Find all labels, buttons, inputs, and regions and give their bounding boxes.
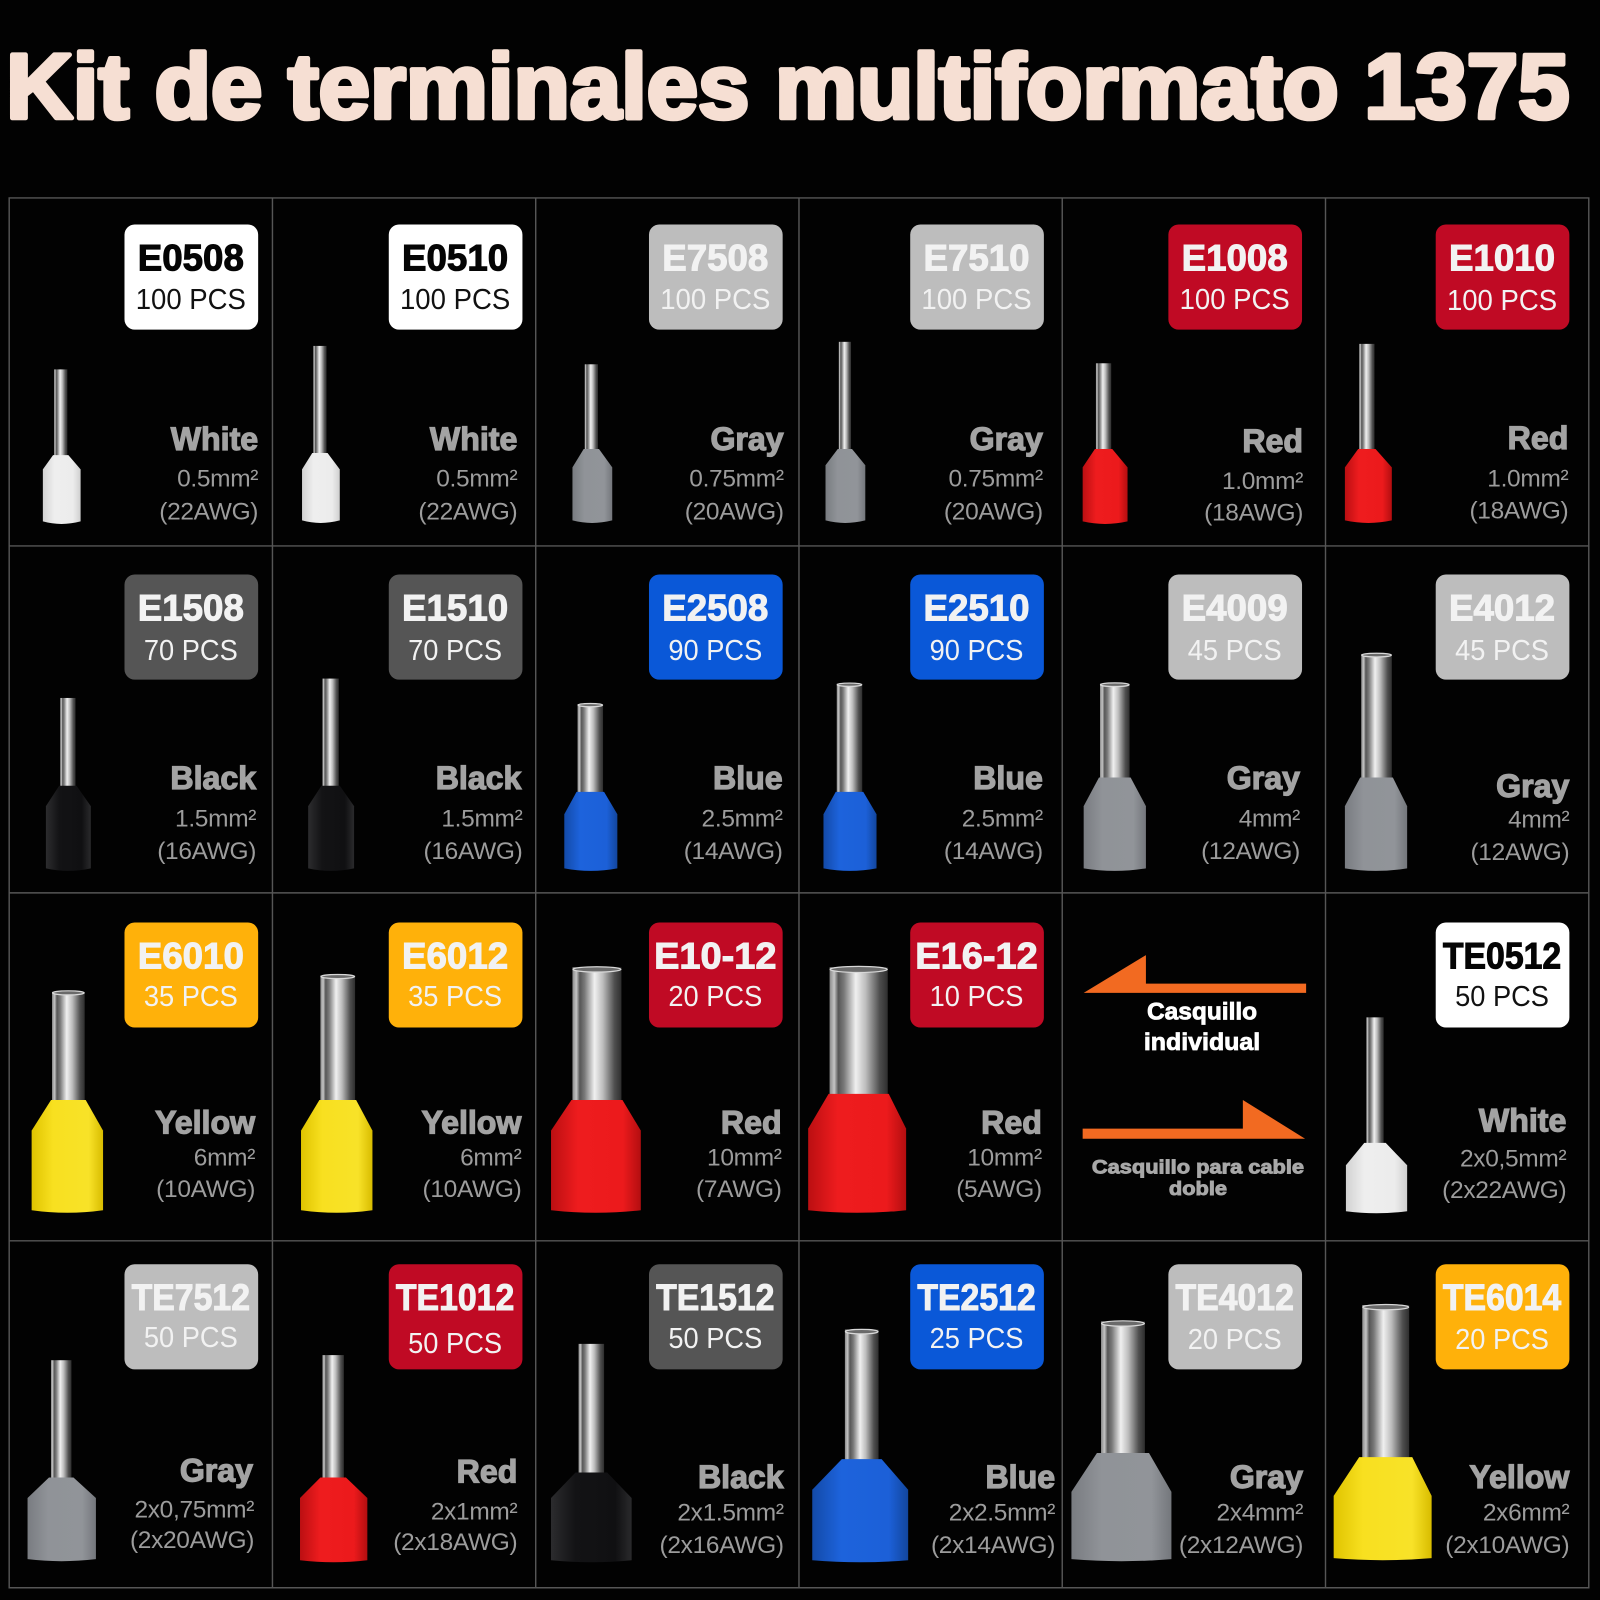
badge: E2510: E2510 xyxy=(923,587,1030,628)
specification: (16AWG) xyxy=(424,838,522,865)
specification xyxy=(684,806,783,865)
specification xyxy=(393,1498,518,1556)
specification xyxy=(130,1496,254,1554)
specification xyxy=(156,1144,255,1203)
panel: E4009 xyxy=(1084,574,1302,871)
colour label: Gray xyxy=(710,421,784,457)
badge: E0510 xyxy=(389,224,522,330)
specification: 2x2.5mm² xyxy=(949,1499,1055,1526)
specification: (7AWG) xyxy=(696,1176,782,1203)
panel: TE6014 xyxy=(1334,1264,1570,1560)
colour label: Blue xyxy=(713,760,783,796)
specification xyxy=(1470,807,1570,866)
colour label: Red xyxy=(981,1105,1042,1141)
specification: (16AWG) xyxy=(157,838,256,865)
badge: E7508: 100 PCS xyxy=(660,284,770,316)
badge: E4009: E4009 xyxy=(1182,587,1288,628)
specification: (5AWG) xyxy=(956,1176,1042,1203)
specification xyxy=(1442,1145,1566,1204)
badge: E6010: 35 PCS xyxy=(144,981,238,1013)
panel: E0510 xyxy=(302,224,522,525)
specification xyxy=(159,466,258,525)
badge: TE6014: TE6014 xyxy=(1443,1277,1562,1318)
specification: 10mm² xyxy=(707,1144,782,1171)
icon: gray ferrule xyxy=(1345,653,1407,871)
specification: 2x0,75mm² xyxy=(134,1496,254,1523)
badge: E1510: E1510 xyxy=(402,587,508,628)
panel: TE4012 xyxy=(1071,1264,1303,1561)
icon: yellow ferrule xyxy=(301,974,372,1213)
specification xyxy=(1469,466,1569,524)
specification: (18AWG) xyxy=(1469,497,1568,524)
specification: 2.5mm² xyxy=(962,806,1043,833)
specification: (18AWG) xyxy=(1204,499,1303,526)
icon: red ferrule xyxy=(551,967,641,1213)
specification xyxy=(685,466,784,525)
badge: E4012: 45 PCS xyxy=(1455,635,1549,667)
specification: (2x10AWG) xyxy=(1445,1532,1569,1559)
colour label: Gray xyxy=(1230,1459,1303,1495)
specification: 0.5mm² xyxy=(177,466,258,493)
colour label: White xyxy=(171,421,258,457)
badge: TE4012: 20 PCS xyxy=(1188,1324,1282,1356)
panel: E1508 xyxy=(46,574,258,871)
specification: 10mm² xyxy=(967,1144,1042,1171)
specification xyxy=(423,1144,522,1203)
badge: E2510 xyxy=(910,574,1044,680)
specification xyxy=(1204,468,1303,526)
badge: E16-12 xyxy=(910,922,1044,1028)
icon: gray twin ferrule xyxy=(28,1360,96,1561)
panel: E2508 xyxy=(564,574,783,871)
badge: TE0512 xyxy=(1436,922,1569,1028)
badge: E0508: E0508 xyxy=(138,237,244,278)
badge: E2508: E2508 xyxy=(662,587,768,628)
icon: gray twin ferrule xyxy=(1071,1321,1171,1561)
panel: TE1012 xyxy=(300,1264,522,1562)
arrow: points right to twin ferrules xyxy=(1083,1100,1305,1139)
badge: E1508: 70 PCS xyxy=(144,635,238,667)
colour label: Gray xyxy=(1227,760,1300,796)
icon: red ferrule xyxy=(1083,363,1128,524)
panel: E6012 xyxy=(301,922,522,1213)
specification: (22AWG) xyxy=(159,498,258,525)
badge: E1010: E1010 xyxy=(1449,237,1555,278)
specification: 0.5mm² xyxy=(436,466,518,493)
badge: E1010: 100 PCS xyxy=(1447,285,1557,317)
colour label: Red xyxy=(457,1454,517,1490)
badge: E2508: 90 PCS xyxy=(668,635,762,667)
title: Kit de terminales multiformato 1375 xyxy=(6,36,1569,138)
colour label: Blue xyxy=(973,760,1043,796)
panel: E16-12 xyxy=(808,922,1044,1213)
badge: E2508 xyxy=(649,574,783,680)
colour label: Gray xyxy=(180,1453,253,1489)
badge: E10-12 xyxy=(649,922,783,1028)
specification: 2x6mm² xyxy=(1483,1499,1570,1526)
colour label: Red xyxy=(1508,420,1568,456)
specification: (22AWG) xyxy=(418,498,517,525)
badge: TE2512: 25 PCS xyxy=(930,1323,1023,1355)
specification: 6mm² xyxy=(194,1144,255,1171)
badge: E10-12: 20 PCS xyxy=(668,981,762,1013)
specification: (10AWG) xyxy=(423,1176,521,1203)
badge: TE1012 xyxy=(389,1264,522,1369)
specification: 6mm² xyxy=(460,1144,522,1171)
specification: (12AWG) xyxy=(1201,838,1300,865)
badge: E4012: E4012 xyxy=(1449,587,1555,628)
specification: (2x20AWG) xyxy=(130,1527,254,1554)
icon: black ferrule xyxy=(308,679,354,871)
specification: (2x18AWG) xyxy=(393,1529,517,1556)
badge: E6010: E6010 xyxy=(138,935,244,976)
badge: TE4012 xyxy=(1168,1264,1302,1369)
specification: 2x1mm² xyxy=(431,1498,518,1525)
specification: 2x1.5mm² xyxy=(677,1499,784,1526)
badge: E1508 xyxy=(124,574,258,680)
badge: E1508: E1508 xyxy=(138,587,244,628)
specification xyxy=(944,466,1043,525)
panel: E1008 xyxy=(1083,224,1303,526)
icon: blue ferrule xyxy=(823,683,877,871)
colour label: Black xyxy=(698,1459,784,1495)
specification: (2x14AWG) xyxy=(931,1532,1055,1559)
icon: black ferrule xyxy=(46,698,91,871)
colour label: Gray xyxy=(970,421,1043,457)
icon: blue twin ferrule xyxy=(812,1329,908,1562)
panel: TE2512 xyxy=(812,1264,1055,1562)
specification: (2x22AWG) xyxy=(1442,1177,1566,1204)
badge: E7510: E7510 xyxy=(923,237,1030,278)
badge: TE1512 xyxy=(649,1264,783,1369)
badge: TE0512: 50 PCS xyxy=(1455,981,1549,1013)
legend text: single ferrule: Casquillo xyxy=(1147,998,1257,1025)
specification xyxy=(1201,806,1300,865)
colour label: Gray xyxy=(1496,768,1570,804)
panel: E10-12 xyxy=(551,922,783,1213)
panel: TE0512 xyxy=(1346,922,1569,1213)
badge: E0510: E0510 xyxy=(402,237,508,278)
badge: TE2512: TE2512 xyxy=(917,1277,1036,1318)
specification xyxy=(931,1499,1055,1559)
badge: E7508 xyxy=(649,224,783,330)
panel: ferrule type legend xyxy=(1083,955,1306,1200)
badge: E1510 xyxy=(389,574,522,680)
colour label: White xyxy=(430,421,517,457)
badge: E7510 xyxy=(910,224,1044,330)
legend text: twin ferrule xyxy=(1092,1156,1304,1200)
specification: (12AWG) xyxy=(1470,839,1569,866)
icon: gray ferrule xyxy=(1084,683,1146,871)
panel: E2510 xyxy=(823,574,1044,871)
panel: E1510 xyxy=(308,574,523,871)
panel: E7510 xyxy=(826,224,1044,525)
badge: TE1512: TE1512 xyxy=(656,1277,774,1318)
specification xyxy=(424,806,523,865)
specification: 2.5mm² xyxy=(702,806,783,833)
specification: 0.75mm² xyxy=(948,466,1043,493)
badge: E0508 xyxy=(124,224,258,330)
legend text: twin ferrule: doble xyxy=(1169,1178,1227,1200)
badge: TE1512: 50 PCS xyxy=(668,1323,762,1355)
legend text: single ferrule: individual xyxy=(1144,1029,1260,1056)
icon: yellow twin ferrule xyxy=(1334,1304,1432,1560)
specification: 4mm² xyxy=(1239,806,1300,833)
badge: E1010 xyxy=(1436,224,1569,330)
badge: E6010 xyxy=(124,922,258,1028)
colour label: Red xyxy=(721,1105,782,1141)
badge: E1008 xyxy=(1168,224,1302,330)
specification: 1.5mm² xyxy=(441,806,523,833)
specification xyxy=(157,806,256,865)
panel: TE7512 xyxy=(28,1264,258,1561)
icon: white ferrule xyxy=(302,346,340,523)
panel: E7508 xyxy=(572,224,784,525)
specification: (10AWG) xyxy=(156,1176,255,1203)
colour label: Yellow xyxy=(421,1105,522,1141)
legend text: single ferrule xyxy=(1144,998,1260,1056)
icon: gray ferrule xyxy=(826,342,865,523)
colour label: Black xyxy=(170,760,256,796)
colour label: Black xyxy=(436,760,522,796)
badge: E10-12: E10-12 xyxy=(654,935,777,976)
specification: 2x4mm² xyxy=(1217,1499,1303,1526)
colour label: White xyxy=(1479,1103,1566,1139)
icon: white twin ferrule xyxy=(1346,1017,1407,1213)
specification: 0.75mm² xyxy=(689,466,784,493)
badge: E7508: E7508 xyxy=(662,237,768,278)
specification: (20AWG) xyxy=(685,498,784,525)
specification xyxy=(696,1144,782,1203)
colour label: Blue xyxy=(985,1459,1055,1495)
specification: (20AWG) xyxy=(944,498,1043,525)
specification xyxy=(660,1499,784,1559)
specification: 1.0mm² xyxy=(1222,468,1303,495)
arrow: points left to single ferrules xyxy=(1084,955,1306,993)
specification: 2x0,5mm² xyxy=(1460,1145,1566,1172)
badge: TE7512 xyxy=(124,1264,258,1369)
icon: black twin ferrule xyxy=(551,1344,632,1562)
legend text: twin ferrule: Casquillo para cable xyxy=(1092,1156,1304,1178)
badge: E0508: 100 PCS xyxy=(136,284,246,316)
badge: E4009 xyxy=(1168,574,1302,680)
icon: white ferrule xyxy=(43,369,81,524)
badge: E1008: E1008 xyxy=(1182,237,1288,278)
specification: (2x16AWG) xyxy=(660,1532,784,1559)
icon: red ferrule xyxy=(1345,344,1392,523)
specification: 1.5mm² xyxy=(175,806,256,833)
specification xyxy=(418,466,518,525)
badge: TE4012: TE4012 xyxy=(1176,1277,1294,1318)
badge: TE7512: 50 PCS xyxy=(144,1322,238,1354)
badge: TE2512 xyxy=(910,1264,1044,1369)
specification xyxy=(956,1144,1042,1203)
badge: E1008: 100 PCS xyxy=(1180,284,1290,316)
panel: E1010 xyxy=(1345,224,1569,524)
colour label: Yellow xyxy=(155,1105,256,1141)
badge: TE0512: TE0512 xyxy=(1443,935,1561,976)
icon: blue ferrule xyxy=(564,703,617,871)
badge: E16-12: E16-12 xyxy=(915,935,1038,976)
badge: E6012: 35 PCS xyxy=(408,981,502,1013)
panel: E6010 xyxy=(32,922,258,1213)
badge: TE1012: TE1012 xyxy=(396,1277,514,1318)
specification: (14AWG) xyxy=(684,838,783,865)
specification: (14AWG) xyxy=(944,838,1043,865)
badge: E0510: 100 PCS xyxy=(400,284,510,316)
badge: E4012 xyxy=(1436,574,1569,680)
panel: E0508 xyxy=(43,224,258,525)
icon: yellow ferrule xyxy=(32,991,103,1213)
badge: E4009: 45 PCS xyxy=(1188,635,1282,667)
specification xyxy=(1179,1499,1303,1559)
specification xyxy=(1445,1499,1570,1559)
badge: E6012: E6012 xyxy=(402,935,508,976)
panel: TE1512 xyxy=(551,1264,784,1562)
specification: 4mm² xyxy=(1508,807,1570,834)
colour label: Yellow xyxy=(1469,1459,1570,1495)
icon: gray ferrule xyxy=(572,364,612,523)
colour label: Red xyxy=(1242,423,1303,459)
specification: 1.0mm² xyxy=(1487,466,1569,493)
badge: E6012 xyxy=(389,922,522,1028)
icon: red twin ferrule xyxy=(300,1355,367,1562)
badge: E16-12: 10 PCS xyxy=(930,981,1023,1013)
badge: TE1012: 50 PCS xyxy=(408,1328,502,1360)
badge: TE7512: TE7512 xyxy=(132,1277,250,1318)
badge: E7510: 100 PCS xyxy=(921,284,1032,316)
badge: E2510: 90 PCS xyxy=(930,635,1023,667)
badge: TE6014: 20 PCS xyxy=(1455,1324,1549,1356)
icon: red ferrule xyxy=(808,966,906,1213)
panel: E4012 xyxy=(1345,574,1570,871)
badge: TE6014 xyxy=(1436,1264,1569,1369)
specification xyxy=(944,806,1043,865)
badge: E1510: 70 PCS xyxy=(408,635,502,667)
specification: (2x12AWG) xyxy=(1179,1532,1303,1559)
